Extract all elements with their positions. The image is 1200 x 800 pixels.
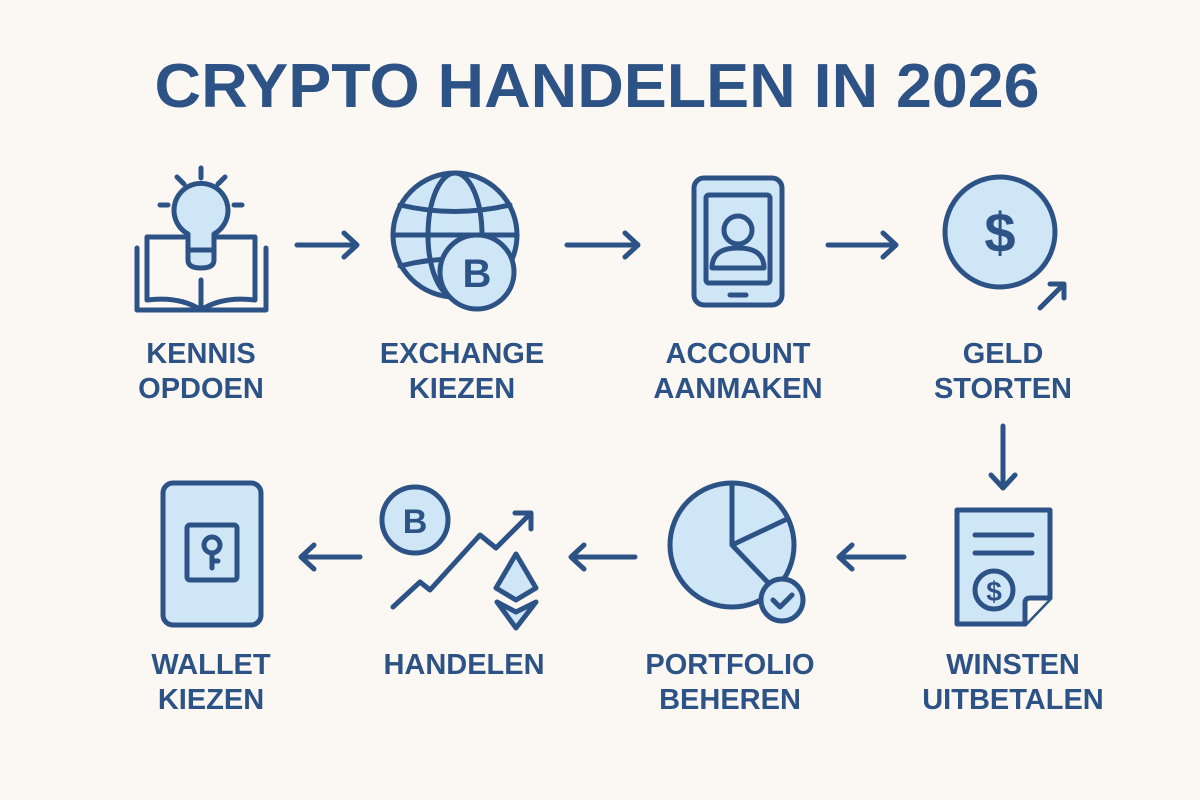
labels row 2: WINSTEN [946,649,1080,681]
icon: pie chart [670,483,803,621]
arrow 1 [297,233,357,257]
icon: trading [382,487,536,628]
arrow 4 [839,545,904,569]
icon: dollar coin [945,177,1064,308]
labels row 2: UITBETALEN [922,684,1104,716]
labels row 2: WALLET [151,649,271,681]
title: CRYPTO HANDELEN IN 2026 [154,52,1040,121]
arrow 5 [571,545,635,569]
icon: trading: B [403,503,427,541]
labels row 1: EXCHANGE [380,338,544,370]
labels row 2: BEHEREN [659,684,801,716]
icon: phone with account [694,178,782,305]
arrow 3 [828,233,896,257]
icon: wallet phone with key [163,483,261,625]
labels row 2: KIEZEN [158,684,264,716]
labels row 1: KENNIS [146,338,256,370]
labels row 2: PORTFOLIO [645,649,815,681]
arrow down [991,426,1015,488]
icon: globe with bitcoin: B [463,252,491,296]
icon: book with lightbulb [137,168,266,310]
labels row 1 [138,338,1072,405]
labels row 2 [151,649,1104,716]
labels row 1: ACCOUNT [666,338,811,370]
arrow 2 [567,233,638,257]
labels row 1: KIEZEN [409,373,515,405]
labels row 2: HANDELEN [383,649,545,681]
labels row 1: OPDOEN [138,373,264,405]
icon: document with dollar [957,510,1050,624]
icon: document with dollar: $ [986,576,1002,607]
icon: dollar coin: $ [984,201,1016,264]
labels row 1: AANMAKEN [653,373,823,405]
arrow 6 [301,545,360,569]
labels row 1: GELD [963,338,1043,370]
labels row 1: STORTEN [934,373,1072,405]
icon: globe with bitcoin [393,173,517,309]
